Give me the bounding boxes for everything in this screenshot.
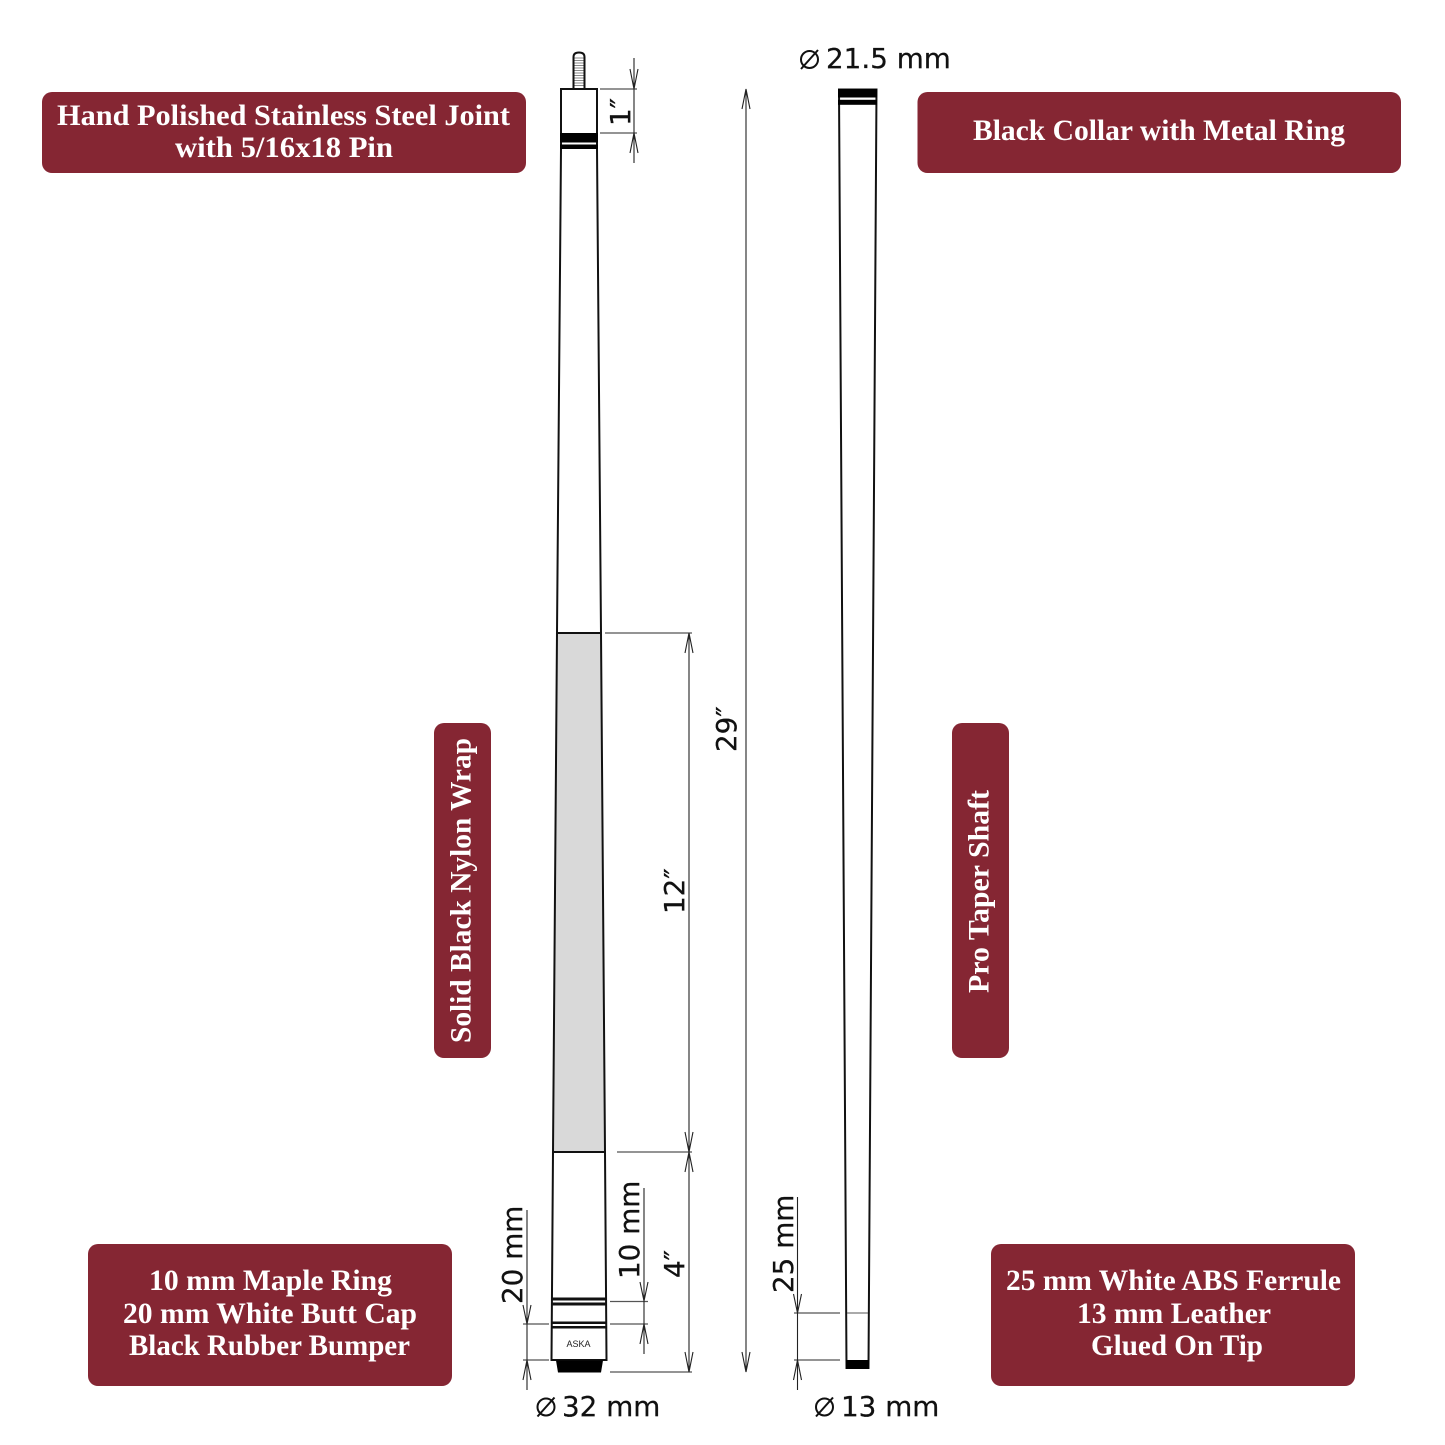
- shaft collar: [838, 89, 877, 105]
- label: black collar: [918, 92, 1401, 173]
- joint collar rings: [560, 133, 598, 149]
- shaft body: [839, 90, 876, 1368]
- dimension: 25 mm: 25 mm: [767, 1195, 800, 1293]
- label: butt components: 10 mm Maple Ring: [149, 1264, 392, 1297]
- joint pin: [574, 52, 584, 89]
- brand text: ASKA: [566, 1339, 591, 1349]
- label: nylon wrap: Solid Black Nylon Wrap: [444, 738, 478, 1043]
- dimension: 20 mm: [496, 1206, 549, 1390]
- label: ferrule and tip: [991, 1244, 1355, 1386]
- label: stainless steel joint: Hand Polished Stainless Steel Joint: [57, 99, 510, 132]
- leather tip: [846, 1360, 869, 1369]
- label: butt components: Black Rubber Bumper: [129, 1329, 410, 1362]
- dimension: 29 inch: 29″: [710, 706, 743, 752]
- dimension: 1 inch: 1″: [604, 98, 637, 126]
- shaft diagram: [838, 89, 877, 1369]
- butt sleeve: [552, 1152, 606, 1360]
- dimension: 4 inch: 4″: [658, 1250, 691, 1278]
- label: butt components: [88, 1244, 452, 1386]
- butt section diagram: [551, 52, 607, 1372]
- maple rings: [551, 1298, 607, 1328]
- label: nylon wrap: [434, 723, 491, 1058]
- rubber bumper: [556, 1360, 603, 1372]
- diameter: 32 mm: 32 mm: [562, 1390, 660, 1423]
- dimension: 1 inch: [600, 58, 638, 163]
- label: butt components: 20 mm White Butt Cap: [123, 1297, 417, 1330]
- label: black collar: Black Collar with Metal Ring: [973, 114, 1345, 147]
- dimension: 29 inch: [710, 89, 750, 1372]
- label: stainless steel joint: with 5/16x18 Pin: [175, 131, 393, 164]
- dimension: 25 mm: [767, 1195, 840, 1390]
- label: stainless steel joint: [42, 92, 526, 173]
- dimension: 10 mm: [610, 1181, 648, 1354]
- label: ferrule and tip: 25 mm White ABS Ferrule: [1006, 1264, 1341, 1297]
- label: ferrule and tip: 13 mm Leather: [1077, 1297, 1271, 1330]
- ferrule line: [847, 1312, 868, 1314]
- label: ferrule and tip: Glued On Tip: [1091, 1329, 1263, 1362]
- label: pro taper shaft: [952, 723, 1009, 1058]
- dimension: 12 inch: 12″: [658, 868, 691, 914]
- dimension: 20 mm: 20 mm: [496, 1206, 529, 1304]
- dimension: 10 mm: 10 mm: [613, 1181, 646, 1279]
- joint and forearm: [557, 89, 601, 633]
- label: pro taper shaft: Pro Taper Shaft: [962, 790, 996, 993]
- dimension: 4 inch: [610, 1152, 693, 1372]
- diameter: 13 mm: 13 mm: [841, 1390, 939, 1423]
- grey wrap: [553, 633, 605, 1152]
- dimension: 12 inch: [605, 633, 693, 1152]
- diameter: 21.5 mm: 21.5 mm: [826, 42, 951, 75]
